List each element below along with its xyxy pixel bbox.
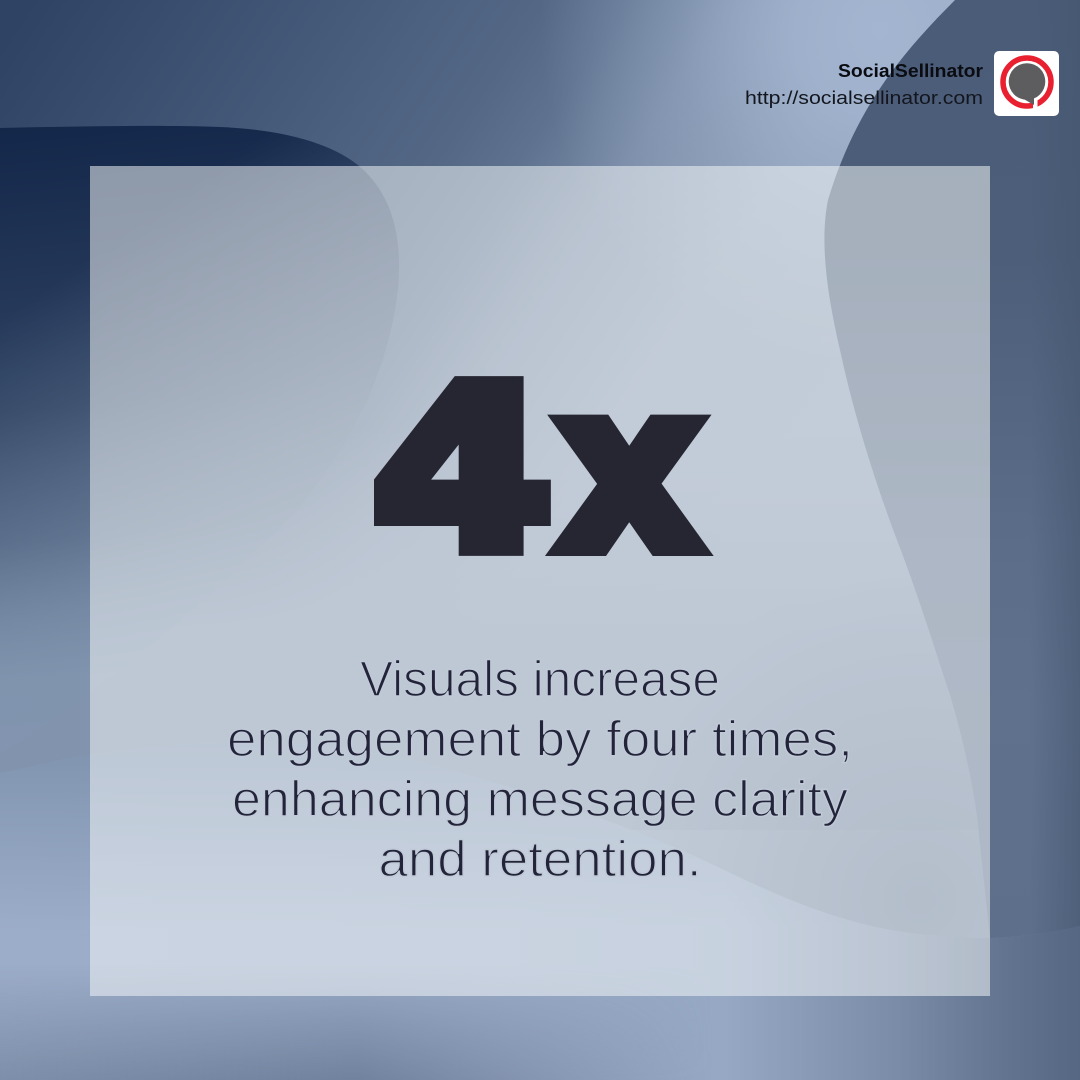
line 3: enhancing message clarity [232, 771, 848, 827]
dark wave top left [0, 126, 399, 754]
digit 4: 4 [371, 339, 554, 601]
brand name: SocialSellinator [838, 61, 983, 81]
brand url: http://socialsellinator.com [745, 87, 983, 108]
brand header [745, 51, 1059, 116]
big stat 4x [371, 337, 702, 603]
dark wave right [824, 0, 1080, 938]
letter x: x [557, 337, 702, 603]
logo icon [994, 51, 1059, 116]
light wave bottom [0, 788, 1080, 1080]
line 4: and retention. [378, 831, 702, 887]
line 1: Visuals increase [360, 651, 720, 707]
body text [227, 651, 853, 887]
translucent panel [90, 166, 990, 996]
line 2: engagement by four times, [227, 711, 853, 767]
